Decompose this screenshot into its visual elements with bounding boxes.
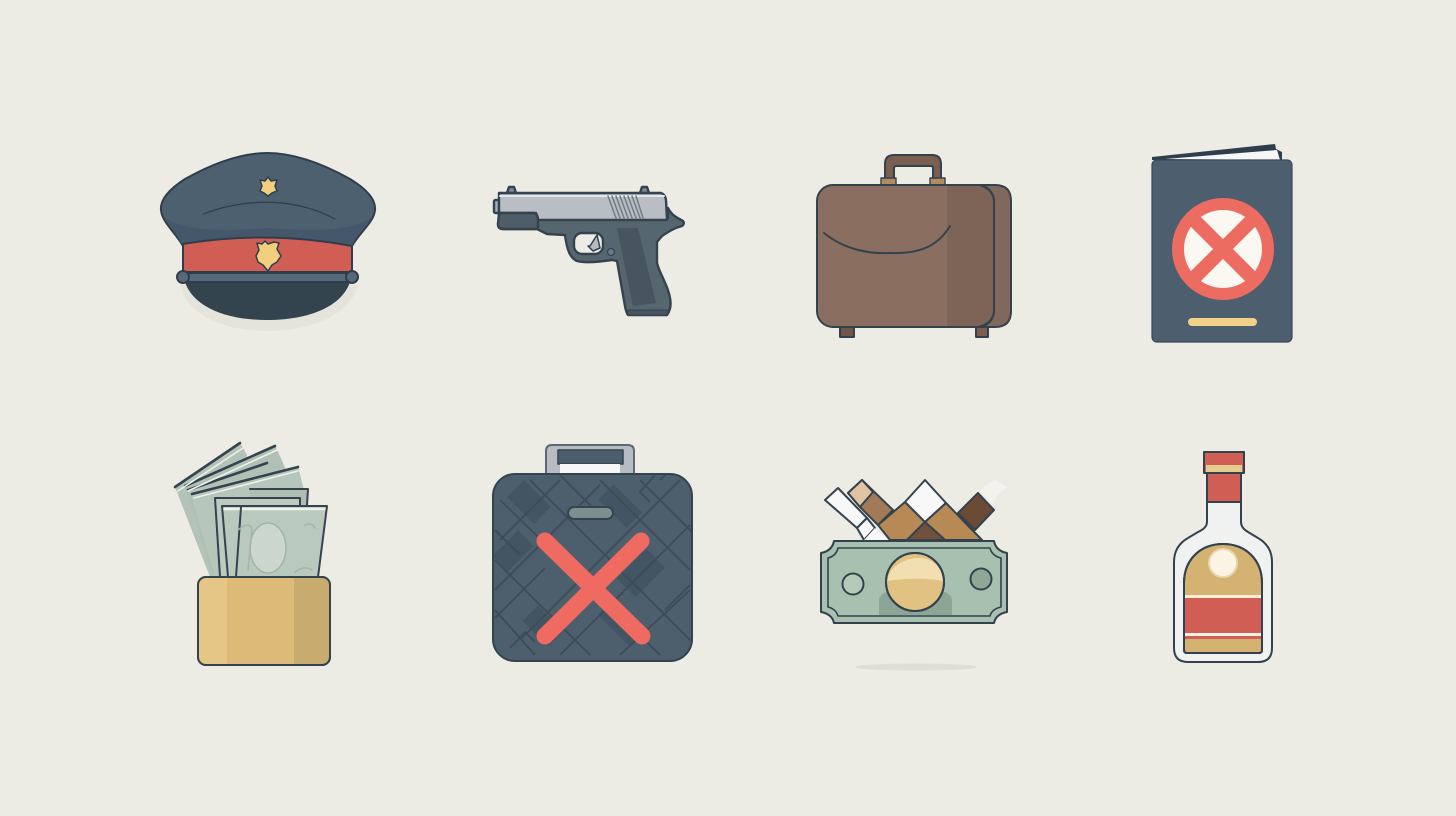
icon: cigarettes and cigars on banknote (821, 480, 1008, 670)
icon: cancelled passport (1152, 144, 1292, 342)
icon: handgun (494, 187, 684, 315)
icon: cash in box (175, 443, 330, 665)
icon: liquor bottle (1174, 452, 1272, 662)
icon: banned bag (492, 445, 692, 661)
icon grid (160, 144, 1293, 670)
icon: briefcase (817, 155, 1011, 337)
icon: officer cap (161, 153, 375, 331)
